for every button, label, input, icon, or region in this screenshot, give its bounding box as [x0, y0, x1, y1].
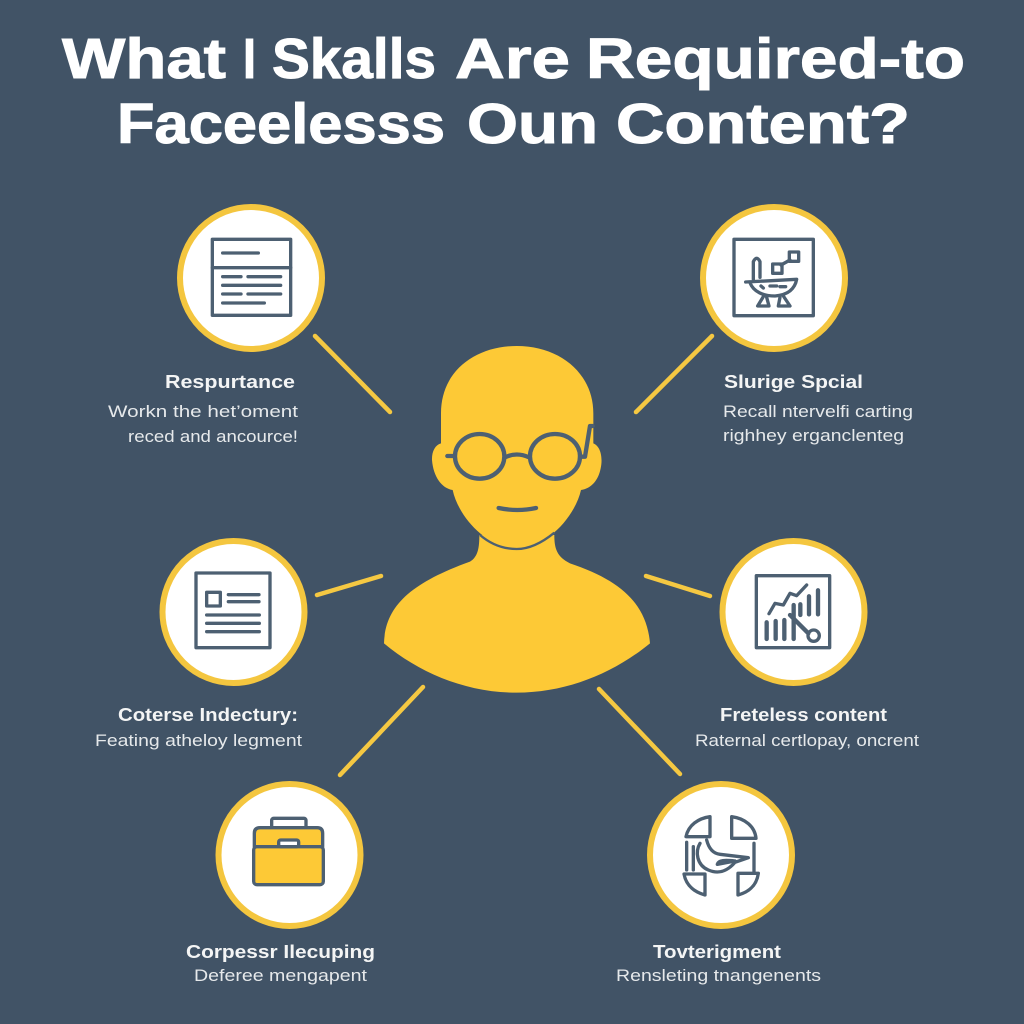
- label: Coterse Indectury: Coterse Indectury:: [118, 705, 298, 725]
- label: Slurige Spcial: Slurige Spcial: [724, 372, 863, 392]
- label: Respurtance: Workn the het’oment: [108, 402, 298, 421]
- label: Freteless content: Freteless content: [720, 705, 887, 725]
- title: I: [243, 27, 256, 91]
- label: Coterse Indectury: [95, 705, 302, 750]
- panel: Tovterigment: [616, 784, 821, 985]
- title: Are: [455, 27, 570, 91]
- panel: Slurige Spcial: [703, 207, 913, 445]
- label: Corpessr Ilecuping: Corpessr Ilecuping: [186, 942, 375, 962]
- label: Slurige Spcial: Recall ntervelfi carting: [723, 402, 913, 421]
- title: Skalls: [272, 27, 436, 91]
- panel: Respurtance: [108, 207, 322, 446]
- label: Respurtance: Respurtance: [165, 372, 295, 392]
- title: [62, 27, 965, 156]
- label: Slurige Spcial: righhey erganclenteg: [723, 426, 904, 445]
- central person figure: [384, 346, 650, 693]
- icon: abstract bracket shape: [684, 817, 758, 895]
- icon: profile document: [196, 573, 270, 648]
- icon: machine bowl: [734, 239, 813, 316]
- title: Oun: [467, 92, 598, 156]
- label: Tovterigment: Tovterigment: [653, 942, 781, 962]
- label: Respurtance: [108, 372, 298, 446]
- label: Corpessr Ilecuping: Deferee mengapent: [194, 966, 367, 985]
- label: Slurige Spcial: [723, 372, 913, 445]
- label: Freteless content: Raternal certlopay, oncrent: [695, 731, 919, 750]
- icon: document layout: [212, 239, 291, 315]
- label: Respurtance: reced and ancource!: [128, 427, 298, 446]
- label: Freteless content: [695, 705, 919, 750]
- panel: Freteless content: [695, 541, 919, 750]
- title: Faceelesss: [117, 92, 445, 156]
- icon: chart and wrench: [756, 576, 830, 648]
- title: Content?: [616, 92, 910, 156]
- connector lines: [315, 336, 712, 775]
- icon: briefcase: [254, 818, 323, 885]
- title: Required-to: [586, 27, 965, 91]
- panel: Corpessr Ilecuping: [186, 784, 375, 985]
- title: What: [62, 27, 226, 91]
- label: Corpessr Ilecuping: [186, 942, 375, 985]
- label: Tovterigment: [616, 942, 821, 985]
- panel: Coterse Indectury: [95, 541, 304, 750]
- label: Coterse Indectury: Feating atheloy legment: [95, 731, 302, 750]
- label: Tovterigment: Rensleting tnangenents: [616, 966, 821, 985]
